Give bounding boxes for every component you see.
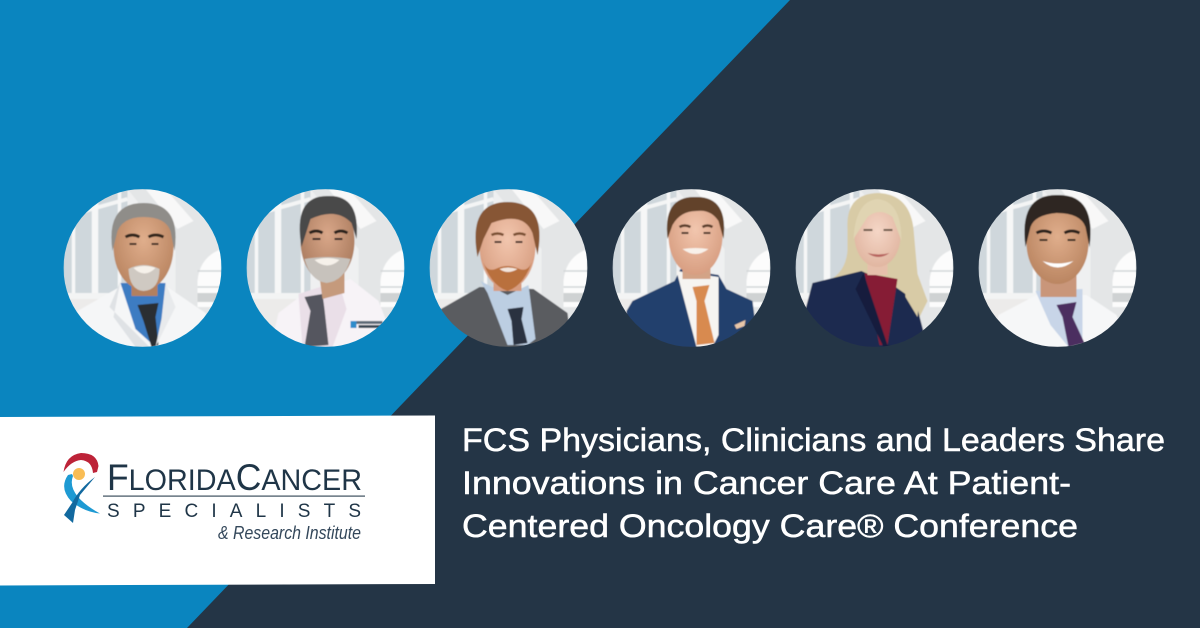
logo wordmark: Specialists: SPECIALISTS	[107, 501, 361, 522]
portrait 6: dark-haired physician in white coat with purple tie	[978, 189, 1136, 347]
white logo panel	[0, 416, 435, 586]
Florida Cancer Specialists logo	[64, 453, 365, 543]
logo rule	[103, 496, 365, 497]
headline: Centered Oncology Care® Conference	[462, 508, 1078, 544]
portrait 5: woman with long blonde hair and navy blazer	[796, 189, 954, 347]
headline	[462, 422, 1165, 544]
portrait 2: physician with grey hair, white coat and patterned tie	[246, 189, 404, 347]
coat logo	[350, 321, 382, 328]
blue diagonal background	[0, 0, 790, 628]
logo wordmark: Research Institute: & Research Institute	[218, 523, 361, 543]
portrait 1: physician in white coat with blue shirt	[64, 189, 222, 347]
portrait 3: man with red hair and grey suit	[430, 189, 588, 347]
logo wordmark: Florida Cancer: FLORIDACANCER	[107, 457, 362, 498]
portrait 4: man in navy suit with orange tie	[612, 189, 770, 347]
headline: FCS Physicians, Clinicians and Leaders Share	[462, 422, 1165, 458]
headline: Innovations in Cancer Care At Patient-	[462, 465, 1071, 501]
icon: awareness ribbon figure	[64, 453, 100, 523]
